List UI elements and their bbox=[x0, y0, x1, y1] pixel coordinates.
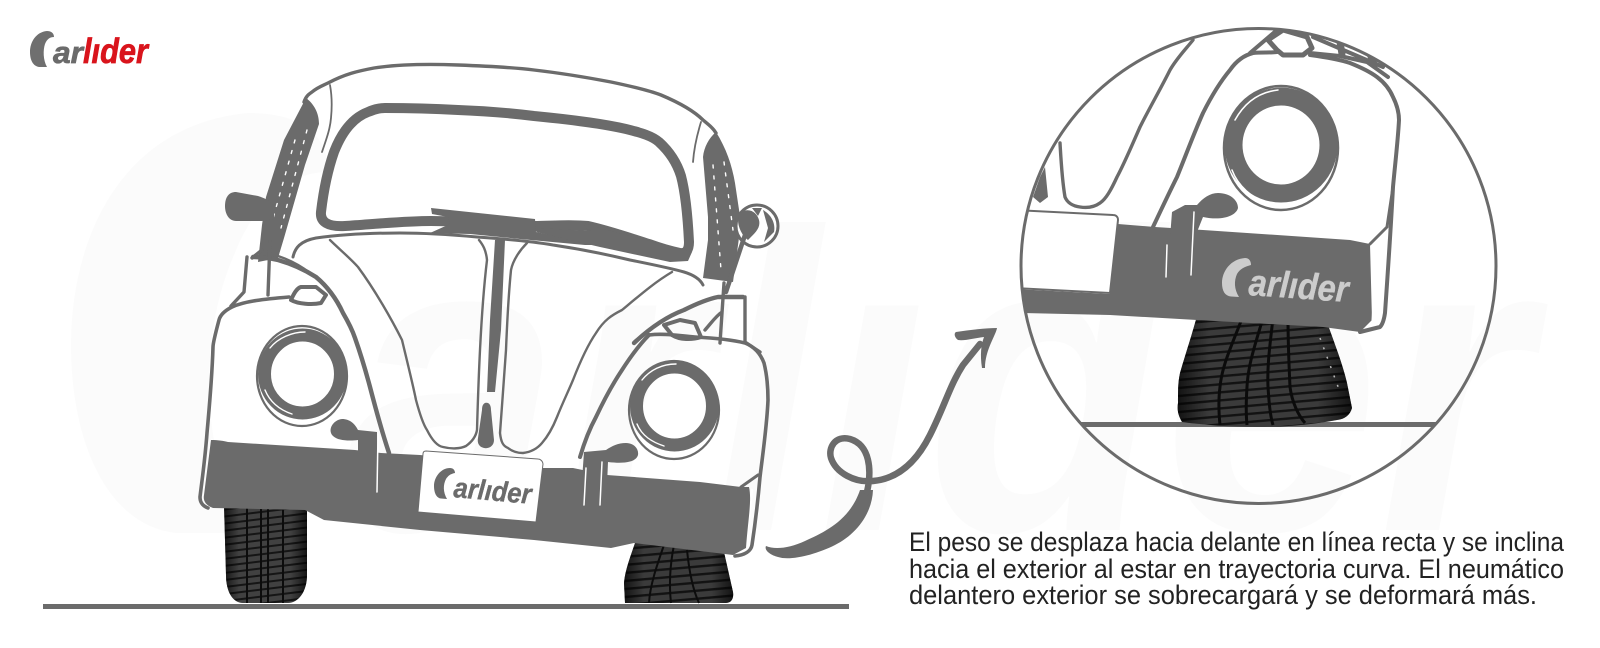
curved arrow bbox=[766, 328, 997, 558]
left mirror bbox=[225, 192, 274, 221]
left headlight bbox=[257, 326, 347, 426]
windshield frame bbox=[321, 108, 689, 253]
plate logo: arlıder bbox=[452, 472, 535, 510]
cowl line bbox=[293, 233, 703, 285]
right front tyre, deformed bbox=[624, 540, 733, 603]
bumper bbox=[204, 440, 750, 555]
logo: Carlider: ar bbox=[53, 35, 85, 70]
inset ground line bbox=[1080, 422, 1438, 427]
circle outline bbox=[1021, 28, 1496, 504]
hood opening lines bbox=[330, 240, 672, 453]
inset fender bbox=[1153, 30, 1399, 332]
left roof inner line bbox=[322, 85, 332, 152]
zoom circle: tyre detail bbox=[1015, 28, 1496, 504]
left front tyre bbox=[224, 505, 307, 603]
logo: Carlider: lıder bbox=[83, 32, 150, 71]
right fender bbox=[580, 283, 768, 556]
right headlight bbox=[629, 361, 719, 459]
left pillar bbox=[258, 98, 319, 262]
right mirror bbox=[726, 205, 778, 292]
caption text: hacia el exterior al estar en trayectoria curva. El neumático bbox=[909, 554, 1564, 584]
wipers bbox=[430, 208, 692, 262]
caption text: delantero exterior se sobrecargará y se deformará más. bbox=[909, 580, 1537, 610]
zoomed scene bbox=[1015, 30, 1438, 427]
inset turn signal bbox=[1166, 193, 1238, 277]
left fender bbox=[200, 240, 389, 508]
ground line bbox=[43, 604, 849, 609]
hood centre strip bbox=[478, 240, 505, 448]
licence plate bbox=[418, 451, 543, 522]
logo: Carlider bbox=[30, 31, 150, 71]
inset bumper bbox=[1015, 224, 1372, 332]
right turn signal bbox=[580, 443, 638, 508]
inset headlight bbox=[1224, 86, 1338, 210]
caption text bbox=[909, 527, 1565, 610]
inset hood line bbox=[1060, 40, 1193, 208]
inset plate bbox=[1015, 210, 1118, 293]
inset tyre bbox=[1178, 312, 1352, 427]
inset bumper edge bbox=[1372, 313, 1373, 320]
outer bumper edge bbox=[741, 475, 758, 487]
left turn signal bbox=[331, 419, 378, 495]
roof bbox=[304, 64, 716, 133]
right pillar bbox=[703, 132, 741, 282]
right roof inner line bbox=[693, 122, 701, 162]
car: front view bbox=[200, 64, 778, 603]
inset logo bbox=[1222, 258, 1351, 302]
inset logo: arlıder bbox=[1247, 262, 1352, 310]
inset centre strip end bbox=[1033, 167, 1048, 203]
